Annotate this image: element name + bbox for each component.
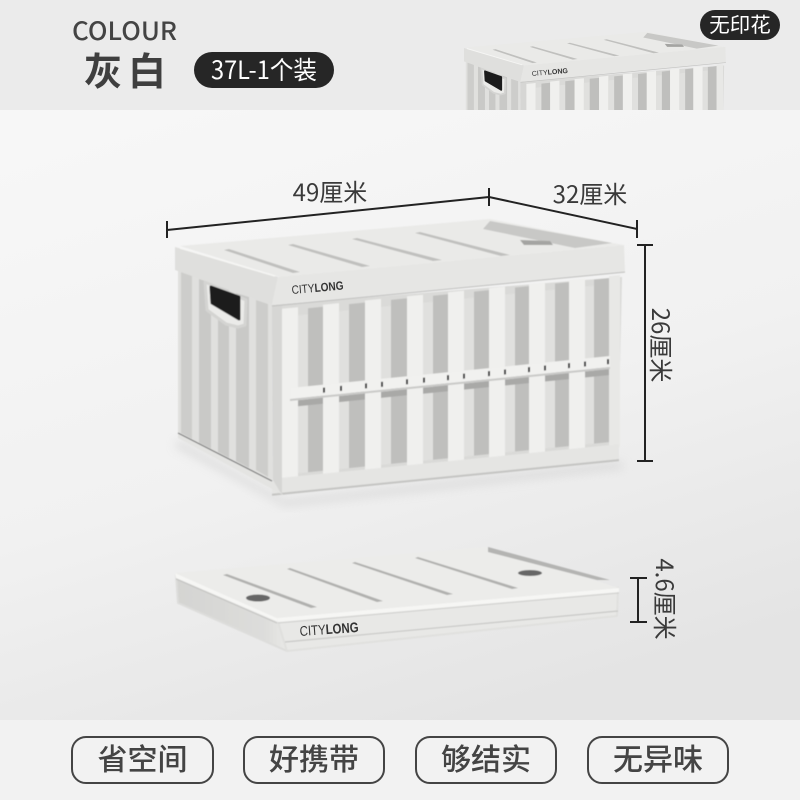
tag: portable: 好携带 [269,735,359,779]
logo on folded box: CITYLONG [299,619,359,639]
dimension: depth 32: 32厘米 [553,175,627,210]
tag: sturdy: 够结实 [441,735,531,779]
heading: colour name: 灰白 [84,41,166,96]
tag: saves space [72,735,213,783]
lid top [180,219,623,277]
dimension: width 49 [167,173,489,238]
lid front face [272,245,625,305]
thumbnail: unprinted box variant [464,33,726,110]
dimension: folded height 4.6: 4.6厘米 [649,558,684,640]
front ribs [272,275,620,496]
lid recess [483,221,612,248]
tag: sturdy [416,735,556,783]
front face [272,277,622,495]
lid left face [175,247,278,305]
heading: COLOUR: COLOUR [72,12,177,48]
left base ledge [178,432,283,495]
tag: no odour: 无异味 [613,735,703,779]
main box shadow [175,440,625,506]
tag: no odour [588,735,728,783]
dimension: width 49: 49厘米 [293,173,367,208]
handle [205,282,246,327]
thumbnail: unprinted box variant: CITYLONG [532,68,569,78]
main background panel [0,110,800,720]
tag: portable [244,735,384,783]
corner column [272,305,282,495]
badge: volume: 37L-1个装 [211,51,317,87]
lower bay shadows [298,398,323,406]
badge: no print: 无印花 [709,8,771,38]
hinge bar [290,356,610,399]
dimension: height 26 [637,245,680,461]
dimension: folded height 4.6 [630,558,684,640]
dimension: depth 32 [489,175,637,238]
left face [178,270,273,480]
bottom tags band [0,720,800,800]
dimension: height 26: 26厘米 [645,308,680,382]
lid slots [224,249,300,273]
top header band [0,0,800,110]
logo on main box: CITYLONG [291,279,344,297]
tag: saves space: 省空间 [98,735,188,779]
product: folded box [175,547,619,651]
product: open storage box [175,219,625,496]
base ledge [272,444,619,496]
